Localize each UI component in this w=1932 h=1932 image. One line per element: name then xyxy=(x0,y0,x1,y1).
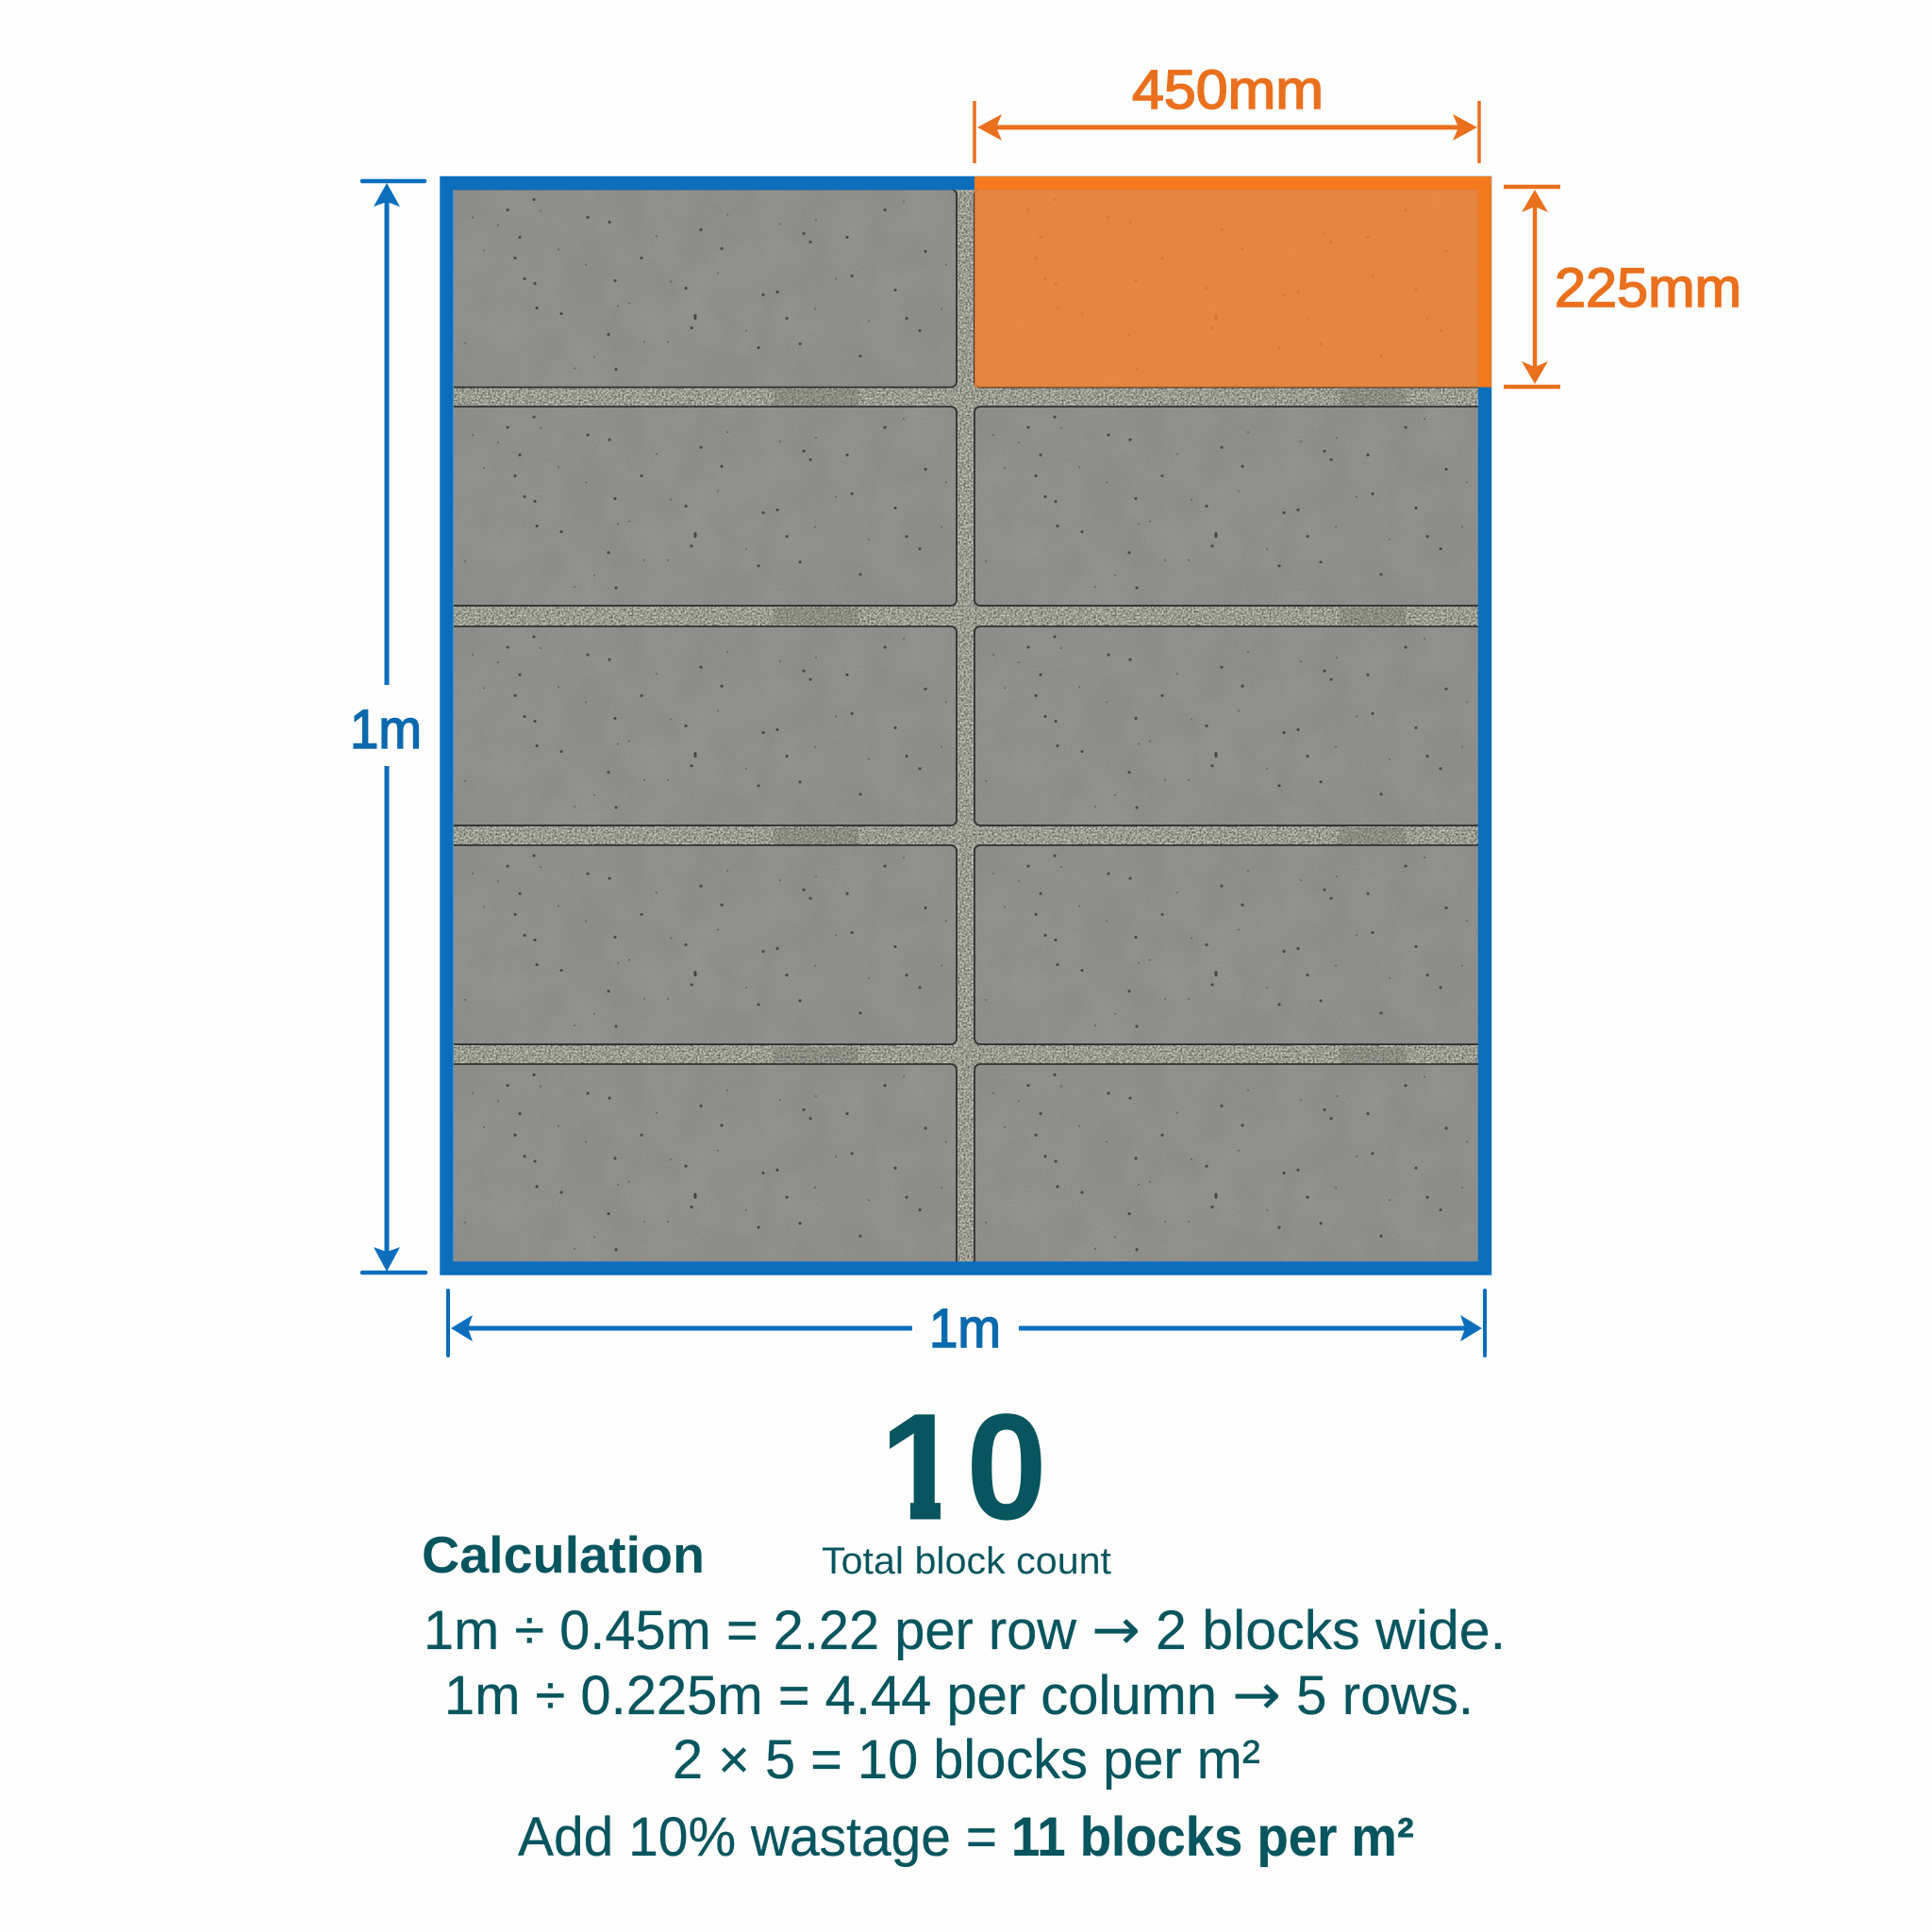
block row 4 left xyxy=(442,845,957,1044)
text block: calculation steps: 1m ÷ 0.45m = 2.22 per row xyxy=(424,1600,1077,1661)
dimension: wall width 1m: 1m xyxy=(929,1298,1001,1359)
infographic: block count per square metre xyxy=(353,69,1739,1868)
panel: one square metre wall of blocks xyxy=(442,176,1491,1268)
block row 2 right xyxy=(974,407,1490,606)
text block: calculation steps xyxy=(424,1597,1506,1868)
dimension: block height 225mm: 225mm xyxy=(1555,258,1741,319)
text block: calculation steps: 11 blocks per m² xyxy=(1011,1807,1414,1868)
heading: calculation: Calculation xyxy=(422,1525,705,1584)
block row 1 left xyxy=(442,189,957,387)
highlighted block: orange overlay and border xyxy=(974,176,1491,387)
dimension: block width 450mm: 450mm xyxy=(1132,59,1324,121)
concrete blocks: five rows of two xyxy=(442,189,1490,1268)
dimension: block width 450mm xyxy=(974,59,1479,163)
block row 5 right xyxy=(974,1064,1490,1268)
text block: calculation steps: → xyxy=(1232,1662,1281,1728)
text block: calculation steps: 2 blocks wide. xyxy=(1156,1600,1506,1661)
block row 3 left xyxy=(442,626,957,825)
block row 2 left xyxy=(442,407,957,606)
block row 4 right xyxy=(974,845,1490,1044)
dimension: block height 225mm xyxy=(1504,187,1741,387)
mortar joints xyxy=(454,190,1478,1262)
text block: calculation steps: Add 10% wastage = xyxy=(518,1807,997,1868)
blue outline of the square metre xyxy=(447,183,1485,1268)
text block: calculation steps: 1m ÷ 0.225m = 4.44 per column xyxy=(444,1665,1217,1726)
block row 5 left xyxy=(442,1064,957,1268)
dimension: wall width 1m xyxy=(448,1291,1485,1359)
label: total block count: Total block count xyxy=(822,1541,1111,1582)
text block: calculation steps: 5 rows. xyxy=(1296,1665,1474,1726)
text block: calculation steps: 2 × 5 = 10 blocks per m² xyxy=(673,1729,1260,1790)
big number: total block count xyxy=(873,1382,1047,1551)
block row 3 right xyxy=(974,626,1490,825)
big number: total block count: 1 xyxy=(880,1382,961,1551)
dimension: wall height 1m xyxy=(350,181,425,1273)
big number: total block count: 0 xyxy=(966,1382,1047,1551)
block row 1 right xyxy=(974,189,1490,387)
dimension: wall height 1m: 1m xyxy=(350,699,422,760)
text block: calculation steps: → xyxy=(1091,1597,1141,1663)
